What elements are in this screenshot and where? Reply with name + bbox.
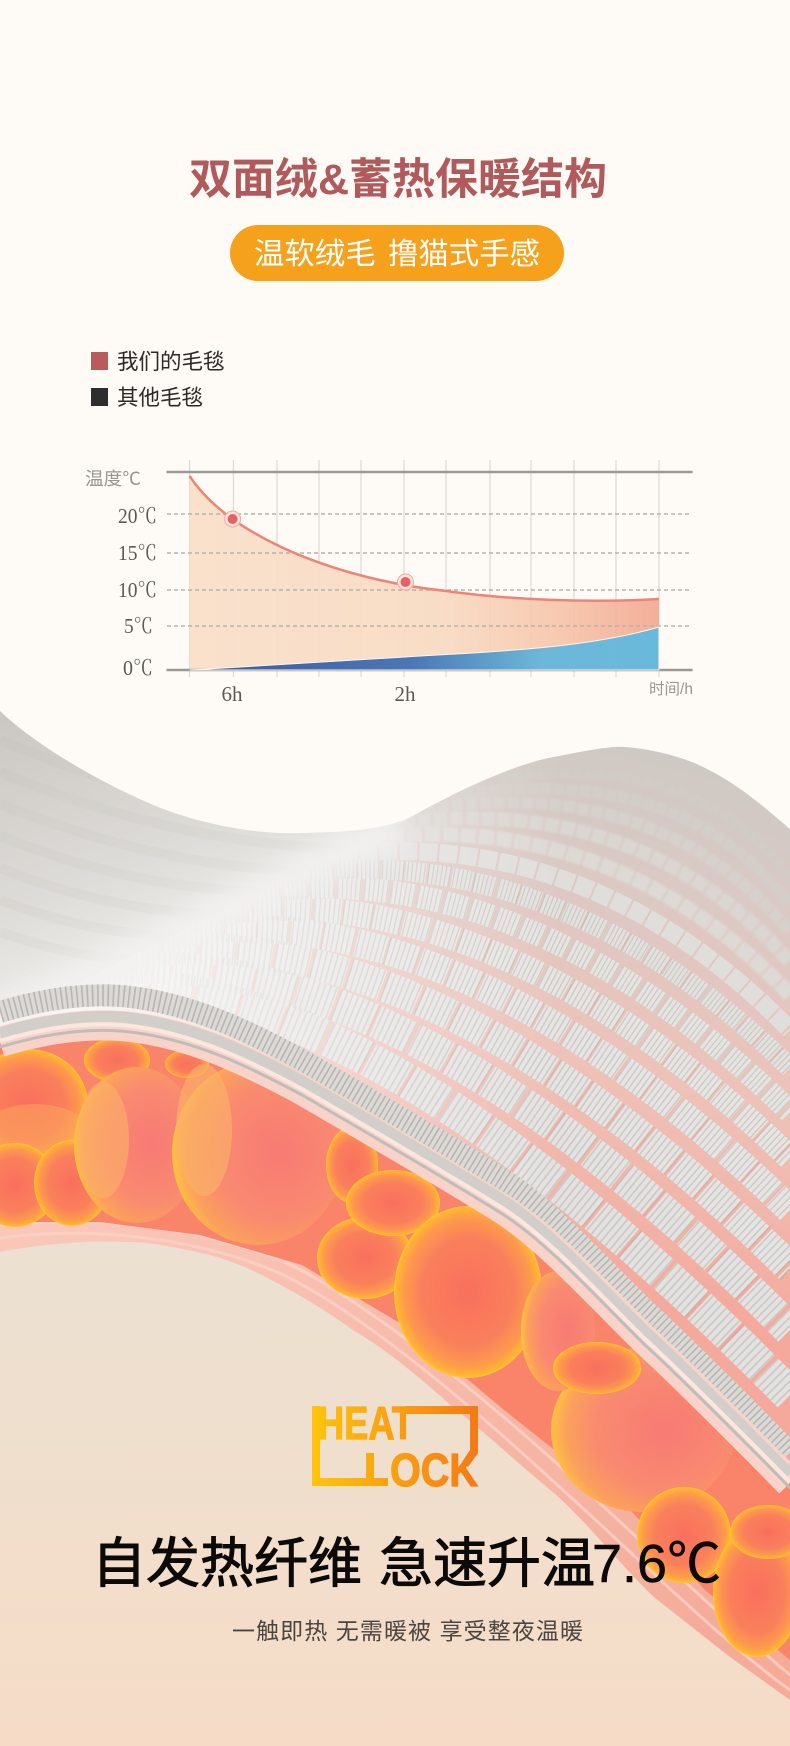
legend xyxy=(91,350,225,410)
subtitle pill: 温软绒毛 撸猫式手感 xyxy=(254,237,540,271)
subtitle pill xyxy=(230,225,564,281)
headline: 自发热纤维 xyxy=(92,1534,362,1594)
logo: HEAT LOCK: HEAT xyxy=(318,1397,414,1449)
far hill of the fabric xyxy=(0,711,411,1000)
legend: 我们的毛毯 xyxy=(117,350,225,374)
beige lower background xyxy=(0,1200,790,1746)
headline: 急速升温 xyxy=(379,1534,595,1594)
y axis labels: 20℃ xyxy=(118,504,157,528)
x axis labels xyxy=(222,680,693,706)
x axis labels: 6h xyxy=(222,682,243,706)
title: 双面绒&蓄热保暖结构 xyxy=(189,156,607,204)
warm blanket area xyxy=(190,476,659,670)
subheadline: 一触即热 无需暖被 享受整夜温暖 xyxy=(232,1618,583,1644)
x axis labels: 2h xyxy=(394,682,416,706)
heating fibre layer with bubbles xyxy=(0,1010,790,1660)
vertical grid xyxy=(190,460,659,677)
warm curve xyxy=(190,476,659,601)
horizontal axes xyxy=(166,472,693,670)
y axis labels xyxy=(85,469,157,680)
y axis labels: 10℃ xyxy=(118,578,157,602)
y axis labels: 温度℃ xyxy=(85,469,141,489)
selvage band at the fabric edge xyxy=(0,995,790,1488)
y axis labels: 5℃ xyxy=(124,614,153,638)
fabric illustration xyxy=(0,350,790,1746)
x axis labels: 时间/h xyxy=(649,680,693,698)
y axis labels: 0℃ xyxy=(123,656,153,680)
legend: 其他毛毯 xyxy=(117,386,203,410)
temperature chart xyxy=(85,460,693,706)
logo: HEAT LOCK: OCK xyxy=(390,1444,478,1496)
data points xyxy=(225,511,414,590)
soft highlight along the ridge xyxy=(0,826,400,1030)
pink underlayer of the fabric xyxy=(0,1030,790,1746)
cool blanket area xyxy=(190,627,659,670)
headline: 7.6℃ xyxy=(592,1534,721,1594)
knit surface of the fabric xyxy=(148,746,790,1462)
logo: HEAT LOCK xyxy=(312,1397,478,1496)
dashed guides xyxy=(167,514,691,626)
y axis labels: 15℃ xyxy=(118,541,157,565)
